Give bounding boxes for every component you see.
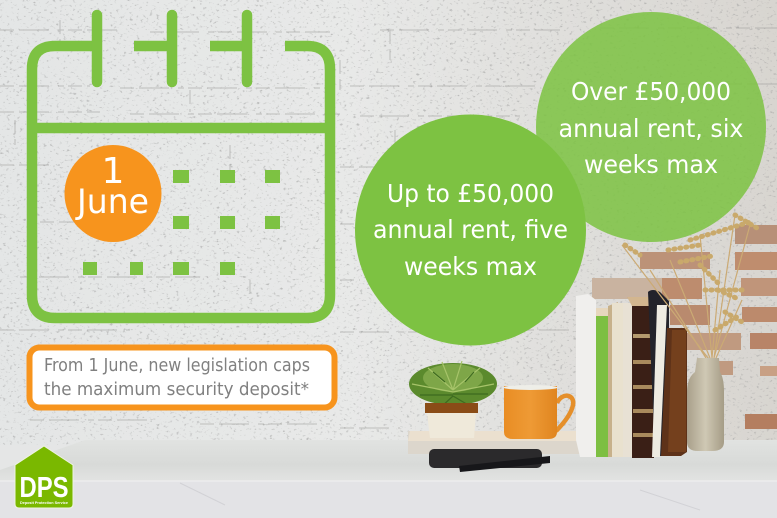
- calendar icon: [32, 15, 330, 318]
- circle: over £50,000: Over £50,000: [571, 77, 731, 106]
- calendar frame: [32, 46, 330, 318]
- circle: up to £50,000: Up to £50,000: [387, 179, 554, 208]
- circle: up to £50,000: weeks max: [404, 252, 537, 281]
- dried flowers: [622, 215, 757, 358]
- marble table: [0, 440, 777, 518]
- date badge: 1 June: June: [75, 182, 149, 222]
- circle: up to £50,000: annual rent, five: [373, 215, 568, 244]
- circle: over £50,000: annual rent, six: [558, 114, 744, 143]
- marble slab: [408, 431, 581, 454]
- callout: legislation note: the maximum security deposit*: [44, 380, 309, 400]
- orange mug: [504, 385, 573, 439]
- date badge: 1 June: 1: [102, 151, 124, 192]
- ceramic vase: [687, 358, 724, 451]
- date badge: 1 June: [64, 145, 162, 242]
- calendar header divider and binder tabs: [32, 46, 330, 128]
- phone and pen: [429, 449, 550, 472]
- DPS logo: DPS: [20, 472, 68, 504]
- callout: legislation note: From 1 June, new legislation caps: [44, 356, 310, 376]
- circle: over £50,000: [536, 12, 766, 242]
- circle: up to £50,000: [355, 114, 586, 346]
- plant in pot: [409, 361, 497, 438]
- calendar day squares: [83, 170, 280, 275]
- exposed red bricks: [592, 225, 777, 429]
- circle: over £50,000: weeks max: [584, 150, 718, 179]
- calendar binder rings: [97, 15, 247, 82]
- row of books: [576, 290, 687, 458]
- callout: legislation note: [30, 348, 334, 408]
- DPS logo: [15, 446, 73, 508]
- DPS logo: Deposit Protection Service: [20, 501, 68, 505]
